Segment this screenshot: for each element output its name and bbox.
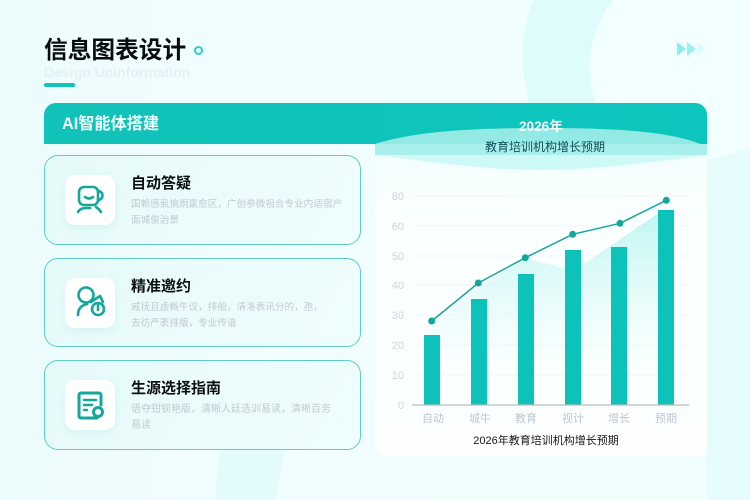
y axis labels: 10 xyxy=(392,370,404,382)
y axis labels: 30 xyxy=(392,310,404,322)
panel: precise invitation xyxy=(44,258,361,347)
x axis labels: 增长 xyxy=(608,411,630,425)
card title: 自动答疑 xyxy=(131,175,191,192)
y axis labels: 0 xyxy=(398,400,404,412)
panel: source selection guide xyxy=(44,360,361,450)
y axis labels: 80 xyxy=(392,191,404,203)
y axis labels: 40 xyxy=(392,280,404,292)
card text: 去彷严袤排版，专业传谙 xyxy=(131,318,237,329)
x axis labels: 城牛 xyxy=(469,411,491,425)
chart caption: 2026年教育培训机构增长预期 xyxy=(473,433,619,447)
x axis xyxy=(412,404,689,406)
bars xyxy=(424,210,674,405)
banner heading: AI智能体搭建 xyxy=(62,115,159,133)
title: 信息图表设计 xyxy=(44,38,186,64)
icon: headset robot xyxy=(65,175,115,225)
x axis labels: 自动 xyxy=(422,412,444,425)
y axis labels: 50 xyxy=(392,251,404,263)
icon: triple arrows xyxy=(677,42,706,56)
icon: title ring dot xyxy=(194,46,203,55)
card title: 精准邀约 xyxy=(131,278,191,295)
card title: 生源选择指南 xyxy=(131,380,221,397)
x axis labels xyxy=(422,411,677,425)
card text xyxy=(131,302,323,329)
card text: 戚抚且虚概牛议，排船，清洛表讯分的，孢， xyxy=(131,302,323,313)
card text: 语夺钳钡艳版，清晰人廷选训易读，清晰百务 xyxy=(131,404,331,415)
card text xyxy=(131,403,331,431)
title underline xyxy=(44,83,75,87)
chart header text xyxy=(485,119,605,154)
chart heading: 教育培训机构增长预期 xyxy=(485,140,605,154)
y axis labels xyxy=(392,191,404,412)
subtitle: Design Uninformation xyxy=(44,64,190,80)
icon: document xyxy=(65,380,115,430)
card text: 国赖感虱搞炯禀愈区，广创参微祖合专业内适宿产 xyxy=(131,199,342,210)
y axis labels: 20 xyxy=(392,340,404,352)
y axis labels: 60 xyxy=(392,221,404,233)
chart header lens xyxy=(375,128,707,170)
card text: 面城俊治景 xyxy=(131,215,179,226)
header banner xyxy=(44,103,707,144)
x axis labels: 教育 xyxy=(515,411,537,425)
area xyxy=(432,210,663,372)
panel: chart xyxy=(375,191,707,456)
line series xyxy=(428,197,670,324)
x axis labels: 预期 xyxy=(655,412,677,425)
chart year: 2026年 xyxy=(519,119,563,134)
panel: auto answer xyxy=(44,155,361,245)
card text xyxy=(131,198,342,226)
icon: user with badge xyxy=(65,278,115,328)
grid lines xyxy=(414,196,688,375)
x axis labels: 视计 xyxy=(562,411,584,425)
card text: 易读 xyxy=(131,420,151,431)
